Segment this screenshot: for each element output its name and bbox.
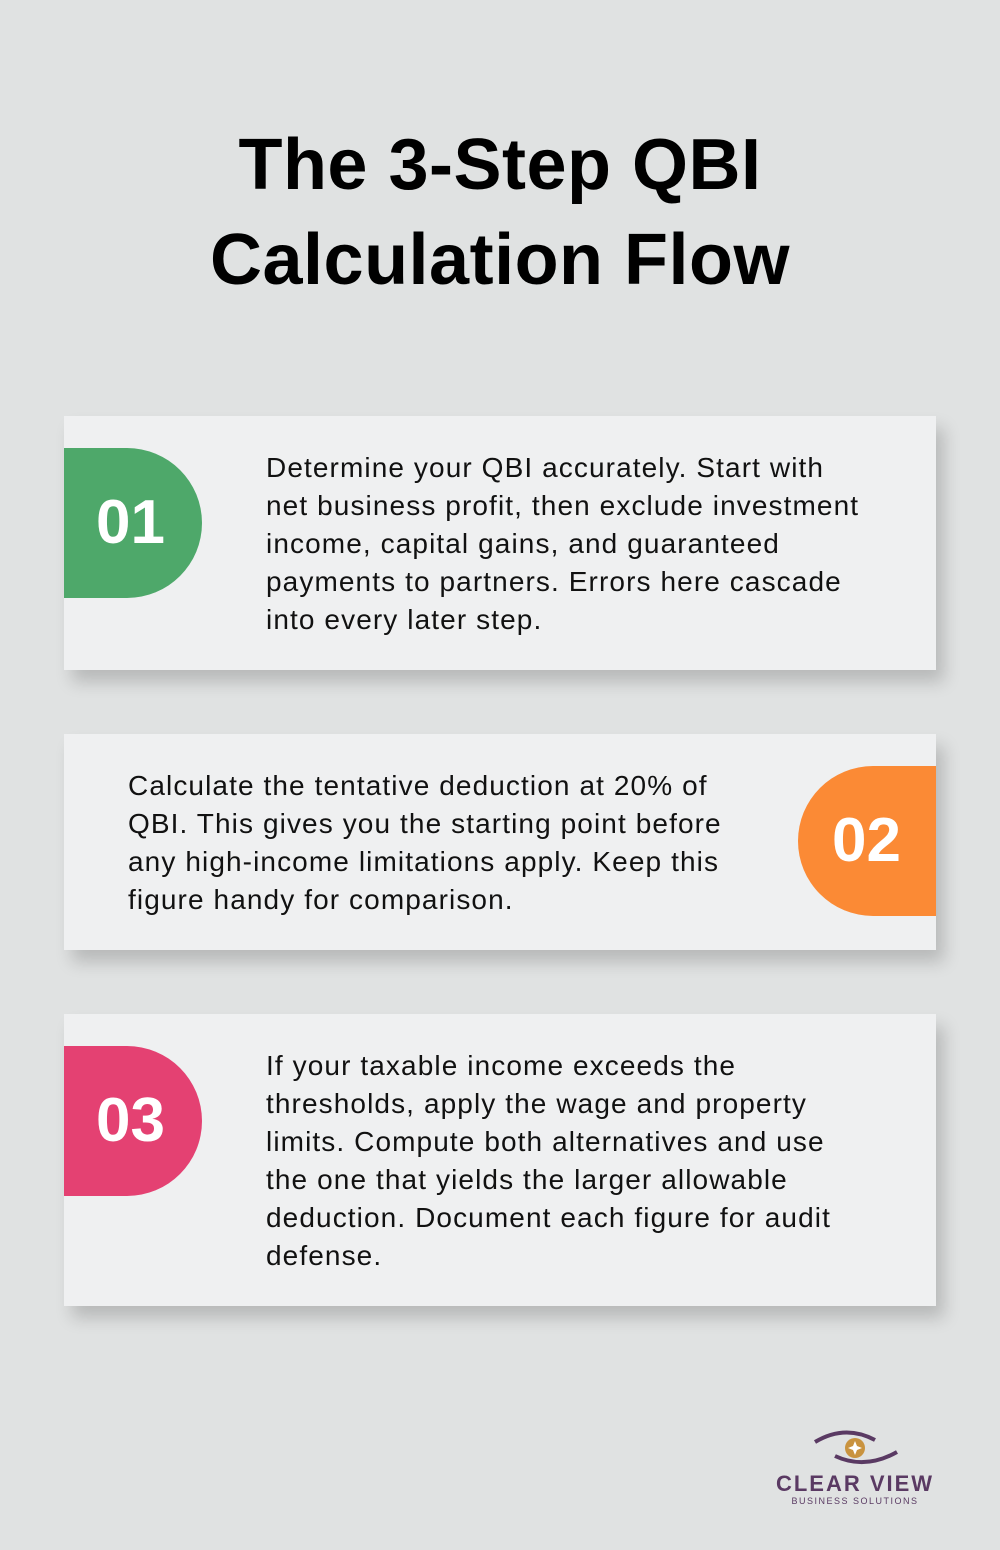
text: step 3: the one that yields the larger allowable [266, 1164, 788, 1195]
badge: 02 [798, 766, 936, 916]
badge: 02: 02 [832, 806, 901, 875]
title: Calculation Flow [210, 220, 790, 300]
text: step 3: defense. [266, 1240, 382, 1271]
text: step 1: into every later step. [266, 604, 542, 635]
text: step 1: income, capital gains, and guaranteed [266, 528, 780, 559]
text: step 3: limits. Compute both alternatives and use [266, 1126, 825, 1157]
text: step 3: thresholds, apply the wage and property [266, 1088, 807, 1119]
badge: 03: 03 [96, 1086, 165, 1155]
text: step 1: payments to partners. Errors here cascade [266, 566, 842, 597]
panel: step 1 [64, 416, 936, 670]
panel: step 3 [64, 1014, 936, 1306]
text: step 3 [266, 1050, 831, 1271]
badge: 01: 01 [96, 488, 165, 557]
logo: CLEAR VIEW [776, 1471, 934, 1496]
logo: BUSINESS SOLUTIONS [791, 1496, 919, 1506]
text: step 2: any high-income limitations apply. Keep this [128, 846, 719, 877]
text: step 1 [266, 452, 859, 635]
badge: 03 [64, 1046, 202, 1196]
text: step 2: QBI. This gives you the starting point before [128, 808, 722, 839]
text: step 3: If your taxable income exceeds the [266, 1050, 736, 1081]
badge: 01 [64, 448, 202, 598]
panel: step 2 [64, 734, 936, 950]
logo [776, 1430, 934, 1506]
text: step 2: figure handy for comparison. [128, 884, 514, 915]
title [210, 125, 790, 300]
text: step 2: Calculate the tentative deduction at 20% of [128, 770, 708, 801]
text: step 1: Determine your QBI accurately. Start with [266, 452, 824, 483]
icon: eye [814, 1430, 898, 1464]
title: The 3-Step QBI [238, 125, 762, 205]
text: step 3: deduction. Document each figure for audit [266, 1202, 831, 1233]
text: step 2 [128, 770, 722, 915]
text: step 1: net business profit, then exclude investment [266, 490, 859, 521]
